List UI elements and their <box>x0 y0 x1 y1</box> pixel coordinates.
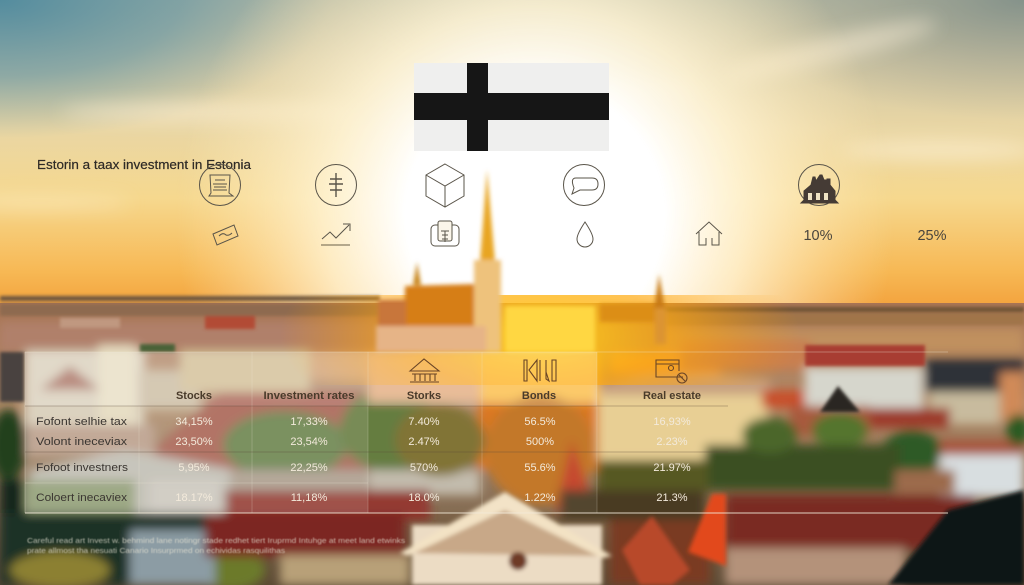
table header icons <box>410 359 687 383</box>
row 2 values: 2.23% <box>656 436 688 448</box>
row 1 values: 7.40% <box>408 416 440 428</box>
icon: speech bubble in circle <box>564 164 604 206</box>
row 4 values: 21.3% <box>656 492 688 504</box>
row 2 values: 23,54% <box>290 436 328 448</box>
title: Estorin a taax investment in Estonia <box>37 157 252 172</box>
table row labels: Fofoot investners <box>36 462 129 474</box>
footnote: prate allmost tha nesuati Canario Insurprmed on echividas rasquilithas <box>27 546 285 555</box>
background: cathedral and sun glow <box>270 170 810 385</box>
icon: real estate card <box>656 360 687 383</box>
row 3 values <box>178 462 691 474</box>
row 3 values: 22,25% <box>290 462 328 474</box>
icon: water drop <box>577 222 593 247</box>
icon: cube <box>426 164 464 207</box>
row 1 values: 17,33% <box>290 416 328 428</box>
icon: ledger symbol in circle <box>316 164 356 206</box>
table washes <box>25 352 597 513</box>
table header labels: Storks <box>407 390 441 402</box>
row 3 values: 55.6% <box>524 462 556 474</box>
panel: investment tax table <box>25 352 948 513</box>
table header labels: Investment rates <box>264 390 354 402</box>
row 4 values: 1.22% <box>524 492 556 504</box>
table header labels: Stocks <box>176 390 212 402</box>
row 4 values: 18.0% <box>408 492 440 504</box>
table header labels: Real estate <box>643 390 701 402</box>
row 4 values: 11,18% <box>291 492 327 504</box>
background: sunset sky <box>0 0 1024 320</box>
table values <box>175 416 691 504</box>
row 1 values: 56.5% <box>524 416 556 428</box>
flag <box>414 63 609 151</box>
row 1 values: 16,93% <box>653 416 691 428</box>
row 4 values: 18.17% <box>175 492 213 504</box>
row 2 values: 500% <box>526 436 554 448</box>
icon: briefcase calculator <box>431 221 459 246</box>
table row labels: Volont ineceviax <box>36 436 128 448</box>
table row labels: Coloert inecaviex <box>36 492 128 504</box>
icon: bonds bars <box>524 360 556 381</box>
rate: 10%: 10% <box>803 228 833 244</box>
icon: house outline <box>696 222 722 245</box>
table header labels: Bonds <box>522 390 556 402</box>
background: blurred town <box>0 296 1024 585</box>
rate: 25%: 25% <box>917 228 947 244</box>
table row labels <box>36 416 129 504</box>
icon: house in circle <box>798 164 840 206</box>
row 4 values <box>175 492 688 504</box>
table header labels <box>176 390 701 402</box>
row 3 values: 21.97% <box>653 462 691 474</box>
row 1 values <box>175 416 691 428</box>
row 2 values: 23,50% <box>175 436 213 448</box>
footnote: Careful read art Invest w. behmind lane notingr stade redhet tiert Iruprmd Intuhge at meet land etwinks <box>27 536 405 545</box>
footnote <box>27 536 405 555</box>
row 3 values: 5,95% <box>178 462 210 474</box>
table grid <box>25 352 948 513</box>
icon: banknote <box>213 225 238 245</box>
icon: document in circle <box>200 164 240 206</box>
row 1 values: 34,15% <box>175 416 213 428</box>
table row labels: Fofont selhie tax <box>36 416 128 428</box>
icon: bank <box>410 359 439 382</box>
row 2 values <box>175 436 688 448</box>
icon row: top circles and cube <box>200 164 840 207</box>
icon row: lower icons and rates <box>213 221 722 247</box>
row 3 values: 570% <box>410 462 438 474</box>
icon: rising chart arrow <box>321 224 350 245</box>
row 2 values: 2.47% <box>408 436 440 448</box>
